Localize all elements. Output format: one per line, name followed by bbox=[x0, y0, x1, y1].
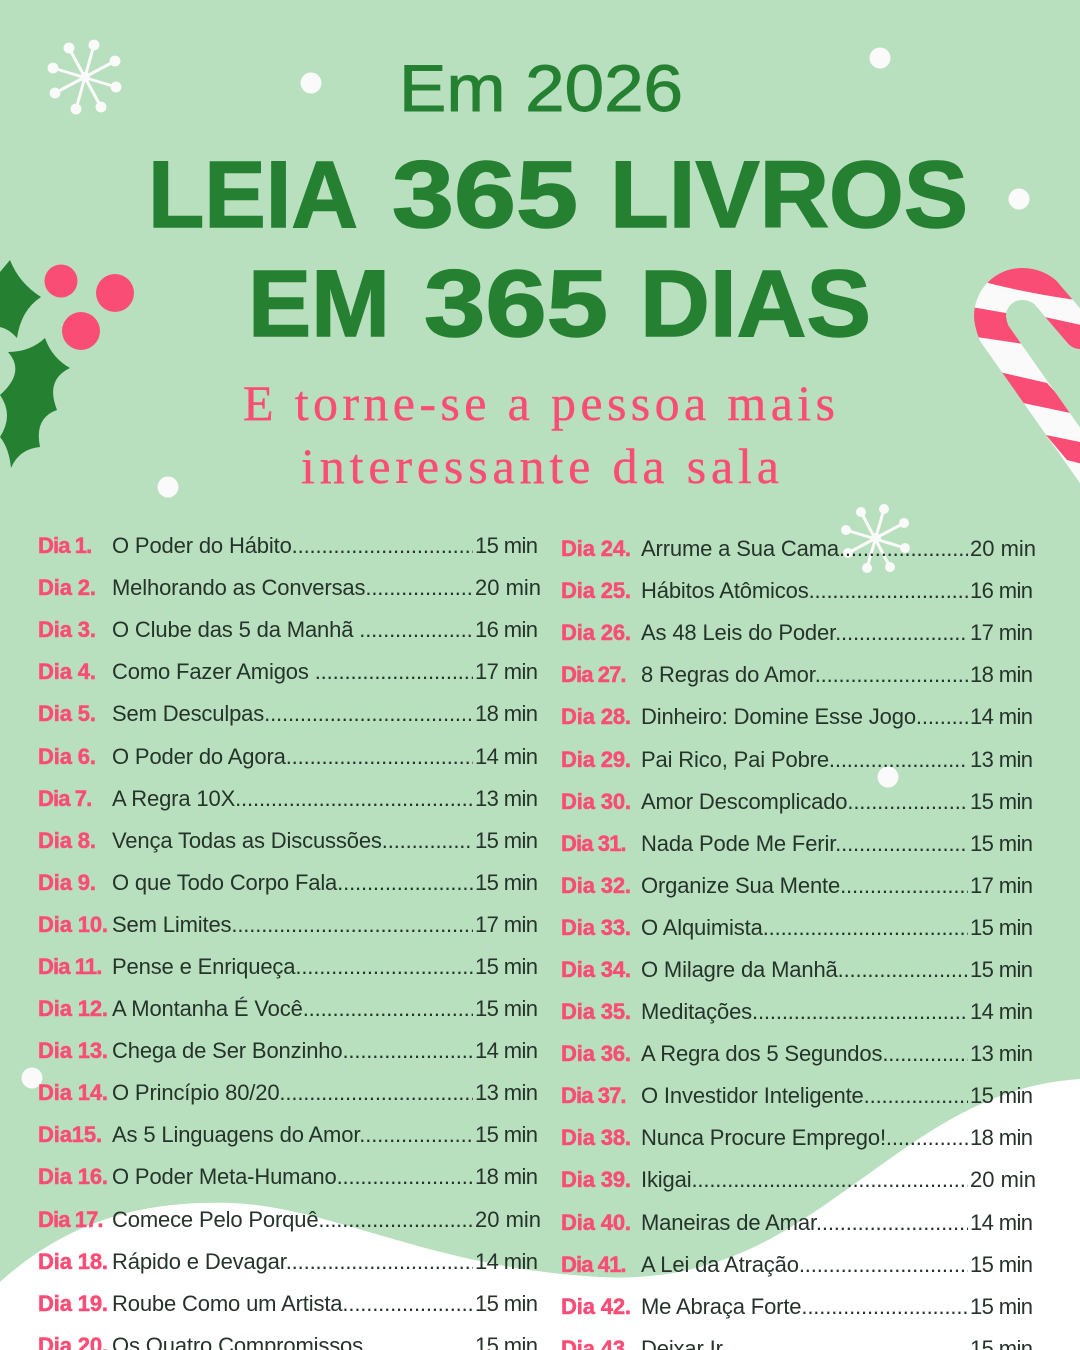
row: Dia 41: Dia 41. bbox=[561, 1252, 626, 1277]
row: Dia 4: Dia 4. bbox=[38, 659, 96, 684]
list: left column bbox=[38, 533, 541, 1350]
row: Dia 36: 13 min bbox=[970, 1041, 1032, 1066]
row: Dia 6: Dia 6. bbox=[38, 744, 96, 769]
row: Dia 38 bbox=[561, 1125, 1032, 1150]
row: Dia 2: Dia 2. bbox=[38, 575, 96, 600]
row: Dia 1: Dia 1. bbox=[38, 533, 91, 558]
row: Dia 37: 15 min bbox=[970, 1083, 1032, 1108]
row: Dia 32: 17 min bbox=[970, 873, 1032, 898]
row: Dia 14: 13 min bbox=[475, 1080, 537, 1105]
row: Dia 40: Dia 40. bbox=[561, 1210, 631, 1235]
list: right column bbox=[561, 536, 1036, 1350]
row: Dia 36 bbox=[561, 1041, 1032, 1066]
row: Dia 41 bbox=[561, 1252, 1032, 1277]
row: Dia 31: 15 min bbox=[970, 831, 1032, 856]
row: Dia 36: Dia 36. bbox=[561, 1041, 631, 1066]
row: Dia 8: Dia 8. bbox=[38, 828, 96, 853]
row: Dia 32 bbox=[561, 873, 1032, 898]
row: Dia 30 bbox=[561, 789, 1032, 814]
row: Dia 19: Dia 19. bbox=[38, 1291, 108, 1316]
row: Dia 9: Dia 9. bbox=[38, 870, 96, 895]
row: Dia 1: 15 min bbox=[475, 533, 537, 558]
row: Dia 35: Dia 35. bbox=[561, 999, 631, 1024]
row: Dia 33: Dia 33. bbox=[561, 915, 631, 940]
row: Dia 24: Dia 24. bbox=[561, 536, 631, 561]
row: Dia 42: Dia 42. bbox=[561, 1294, 631, 1319]
row: Dia 29: Dia 29. bbox=[561, 747, 631, 772]
row: Dia 24: 20 min bbox=[970, 536, 1036, 561]
row: Dia 28: Dia 28. bbox=[561, 704, 631, 729]
row: Dia 39: 20 min bbox=[970, 1167, 1036, 1192]
row: Dia 34 bbox=[561, 957, 1032, 982]
row: Dia 26 bbox=[561, 620, 1032, 645]
row: Dia 33: 15 min bbox=[970, 915, 1032, 940]
row: Dia 11: Dia 11. bbox=[38, 954, 101, 979]
row: Dia 10: 17 min bbox=[475, 912, 537, 937]
row: Dia 41: 15 min bbox=[970, 1252, 1032, 1277]
heading: Em 2026: Em 2026 bbox=[399, 51, 683, 125]
row: Dia 3: 16 min bbox=[475, 617, 537, 642]
row: Dia 7: 13 min bbox=[475, 786, 537, 811]
row: Dia 33 bbox=[561, 915, 1032, 940]
row: Dia 17: 20 min bbox=[475, 1207, 541, 1232]
row: Dia 35: 14 min bbox=[970, 999, 1032, 1024]
row: Dia 27: Dia 27. bbox=[561, 662, 626, 687]
row: Dia 42: 15 min bbox=[970, 1294, 1032, 1319]
icon: snowflake above list bbox=[841, 504, 910, 573]
row: Dia 15: 15 min bbox=[475, 1122, 537, 1147]
row: Dia 37: Dia 37. bbox=[561, 1083, 626, 1108]
heading: line one: 365 bbox=[392, 142, 578, 248]
row: Dia 25: 16 min bbox=[970, 578, 1032, 603]
row: Dia 13: 14 min bbox=[475, 1038, 537, 1063]
row: Dia 28: 14 min bbox=[970, 704, 1032, 729]
row: Dia 18: 14 min bbox=[475, 1249, 537, 1274]
row: Dia 5: 18 min bbox=[475, 701, 537, 726]
row: Dia 43 bbox=[561, 1334, 1041, 1350]
row: Dia 35 bbox=[561, 999, 1032, 1024]
row: Dia 2: 20 min bbox=[475, 575, 541, 600]
row: Dia 28 bbox=[561, 704, 1032, 729]
heading: line one: LEIA bbox=[148, 142, 358, 248]
row: Dia 31 bbox=[561, 831, 1032, 856]
row: Dia 19: 15 min bbox=[475, 1291, 537, 1316]
row: Dia 8: 15 min bbox=[475, 828, 537, 853]
row: Dia 12: 15 min bbox=[475, 996, 537, 1021]
row: Dia 27 bbox=[561, 662, 1032, 687]
heading: line two: EM bbox=[248, 251, 390, 357]
row: Dia 40 bbox=[561, 1210, 1032, 1235]
row: Dia 13: Dia 13. bbox=[38, 1038, 108, 1063]
row: Dia 5: Dia 5. bbox=[38, 701, 96, 726]
row: Dia 32: Dia 32. bbox=[561, 873, 631, 898]
snow hill bbox=[0, 1079, 1080, 1350]
row: Dia 14: Dia 14. bbox=[38, 1080, 108, 1105]
row: Dia 30: 15 min bbox=[970, 789, 1032, 814]
snow dots bbox=[22, 48, 1030, 1088]
subtitle: line one: E torne-se a pessoa mais bbox=[243, 375, 835, 431]
row: Dia 39 bbox=[561, 1167, 1036, 1192]
row: Dia 9: 15 min bbox=[475, 870, 537, 895]
row: Dia 27: 18 min bbox=[970, 662, 1032, 687]
row: Dia 31: Dia 31. bbox=[561, 831, 626, 856]
row: Dia 17: Dia 17. bbox=[38, 1207, 103, 1232]
row: Dia 38: 18 min bbox=[970, 1125, 1032, 1150]
row: Dia 16: Dia 16. bbox=[38, 1164, 108, 1189]
row: Dia 10: Dia 10. bbox=[38, 912, 108, 937]
row: Dia 24 bbox=[561, 536, 1036, 561]
row: Dia 26: Dia 26. bbox=[561, 620, 631, 645]
row: Dia 29 bbox=[561, 747, 1032, 772]
row: Dia 34: 15 min bbox=[970, 957, 1032, 982]
row: Dia 7: Dia 7. bbox=[38, 786, 91, 811]
row: Dia 18: Dia 18. bbox=[38, 1249, 108, 1274]
row: Dia 4: 17 min bbox=[475, 659, 537, 684]
row: Dia 6: 14 min bbox=[475, 744, 537, 769]
subtitle: line two: interessante da sala bbox=[301, 438, 779, 494]
row: Dia 39: Dia 39. bbox=[561, 1167, 631, 1192]
icon: snowflake top left bbox=[48, 40, 121, 114]
row: Dia 34: Dia 34. bbox=[561, 957, 631, 982]
row: Dia 40: 14 min bbox=[970, 1210, 1032, 1235]
row: Dia 25: Dia 25. bbox=[561, 578, 631, 603]
row: Dia 3: Dia 3. bbox=[38, 617, 96, 642]
heading: line one: LIVROS bbox=[610, 142, 968, 248]
row: Dia 15: Dia15. bbox=[38, 1122, 102, 1147]
row: Dia 26: 17 min bbox=[970, 620, 1032, 645]
row: Dia 12: Dia 12. bbox=[38, 996, 108, 1021]
icon: candy cane bbox=[974, 268, 1080, 483]
row: Dia 25 bbox=[561, 578, 1032, 603]
row: Dia 37 bbox=[561, 1083, 1032, 1108]
row: Dia 16: 18 min bbox=[475, 1164, 537, 1189]
heading: line two: DIAS bbox=[640, 251, 871, 357]
row: Dia 42 bbox=[561, 1292, 1041, 1322]
heading: line two bbox=[248, 251, 871, 357]
icon: holly leaves and berries bbox=[0, 260, 134, 468]
row: Dia 29: 13 min bbox=[970, 747, 1032, 772]
row: Dia 11: 15 min bbox=[475, 954, 537, 979]
heading: line two: 365 bbox=[424, 251, 608, 357]
row: Dia 30: Dia 30. bbox=[561, 789, 631, 814]
heading: line one bbox=[148, 142, 968, 248]
row: Dia 38: Dia 38. bbox=[561, 1125, 631, 1150]
